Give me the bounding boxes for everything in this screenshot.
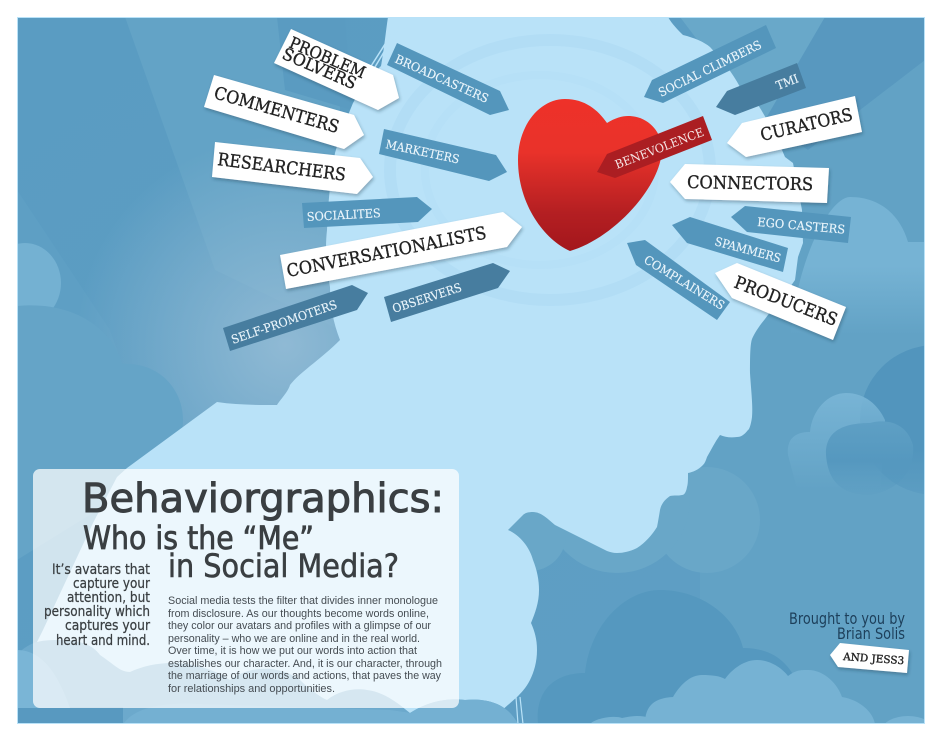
tag: socialites [302,197,432,228]
head silhouette [33,17,803,724]
heading: title [82,476,444,585]
tag: observers [384,263,510,322]
clouds: right side [788,197,924,484]
heading: title: Behaviorgraphics: [82,476,444,522]
tag: ego casters [731,206,851,243]
text block: body copy: they color our avatars and profiles with a glimpse of our [168,620,431,632]
tag: curators [727,96,862,157]
text block: body copy: from disclosure. As our thoughts become words online, [168,608,429,620]
text block: tagline: It’s avatars that [52,562,150,578]
concentric rings around heart [390,40,710,300]
heading: title: Who is the “Me” [83,519,314,557]
tag: ego casters: EGO CASTERS [757,215,846,237]
tag: curators: CURATORS [759,105,855,146]
heart [518,99,662,251]
clouds: bottom over shoulders [17,640,518,724]
text block: tagline [44,562,150,649]
tag: commenters [204,75,364,149]
tag: observers: OBSERVERS [391,280,463,316]
credit: brought to you by [789,609,905,643]
tag: tmi [716,63,806,115]
text block: tagline: personality which [44,604,150,620]
text block: body copy: Social media tests the filter that divides inner monologue [168,595,438,607]
tag: benevolence: BENEVOLENCE [613,125,706,172]
tag: conversationalists: CONVERSATIONALISTS [285,224,488,282]
tag: researchers: RESEARCHERS [216,150,347,186]
tag: benevolence [597,116,712,178]
credit: brought to you by: Brought to you by [789,609,905,628]
text block: body copy: for relationships and opportunities. [168,683,335,695]
clouds: upper left [18,243,183,559]
text block: tagline: attention, but [67,590,150,606]
tag: and jess3: AND JESS3 [842,651,904,667]
text block: tagline: capture your [73,576,150,592]
text block: body copy: the marriage of our words and actions, that paves the way [168,670,442,682]
tag: socialites: SOCIALITES [306,206,381,224]
clouds: chin [508,468,700,573]
tag: commenters: COMMENTERS [212,84,341,138]
tag: producers: PRODUCERS [731,273,840,331]
tag: problem solvers: SOLVERS [279,44,359,93]
tag: social climbers: SOCIAL CLIMBERS [656,38,764,100]
tag: spammers: SPAMMERS [713,234,783,265]
text block: body copy: personality – who we are online and in the real world. [168,633,420,645]
tag: spammers [672,217,788,272]
panel: title and intro [33,469,459,708]
tag: self-promoters [223,285,368,351]
tag: marketers: MARKETERS [384,137,461,167]
text block: tagline: heart and mind. [56,633,150,649]
tag: broadcasters: BROADCASTERS [393,52,491,106]
tag: tmi: TMI [774,71,801,93]
tag: complainers [627,240,730,320]
text block: tagline: captures your [65,618,150,634]
tag: marketers [379,129,507,181]
clouds: lower right [538,590,924,723]
tag: self-promoters: SELF-PROMOTERS [229,297,339,347]
tag: connectors: CONNECTORS [687,173,813,195]
text block: body copy: establishes our character. And, it is our character, through [168,658,442,670]
text block: body copy [168,595,442,695]
tag: broadcasters [387,43,509,115]
neck strap lines [516,697,523,724]
tag: producers [715,263,846,340]
heading: title: in Social Media? [168,547,399,585]
tag: researchers [212,142,373,194]
tag: and jess3 [830,643,909,673]
tag: connectors [670,164,829,203]
credit: brought to you by: Brian Solis [837,624,905,643]
tag: complainers: COMPLAINERS [641,253,727,313]
tag: problem solvers [274,29,399,110]
tag: problem solvers: PROBLEM [286,33,369,82]
text block: body copy: Over time, it is how we put our words into action that [168,645,417,657]
